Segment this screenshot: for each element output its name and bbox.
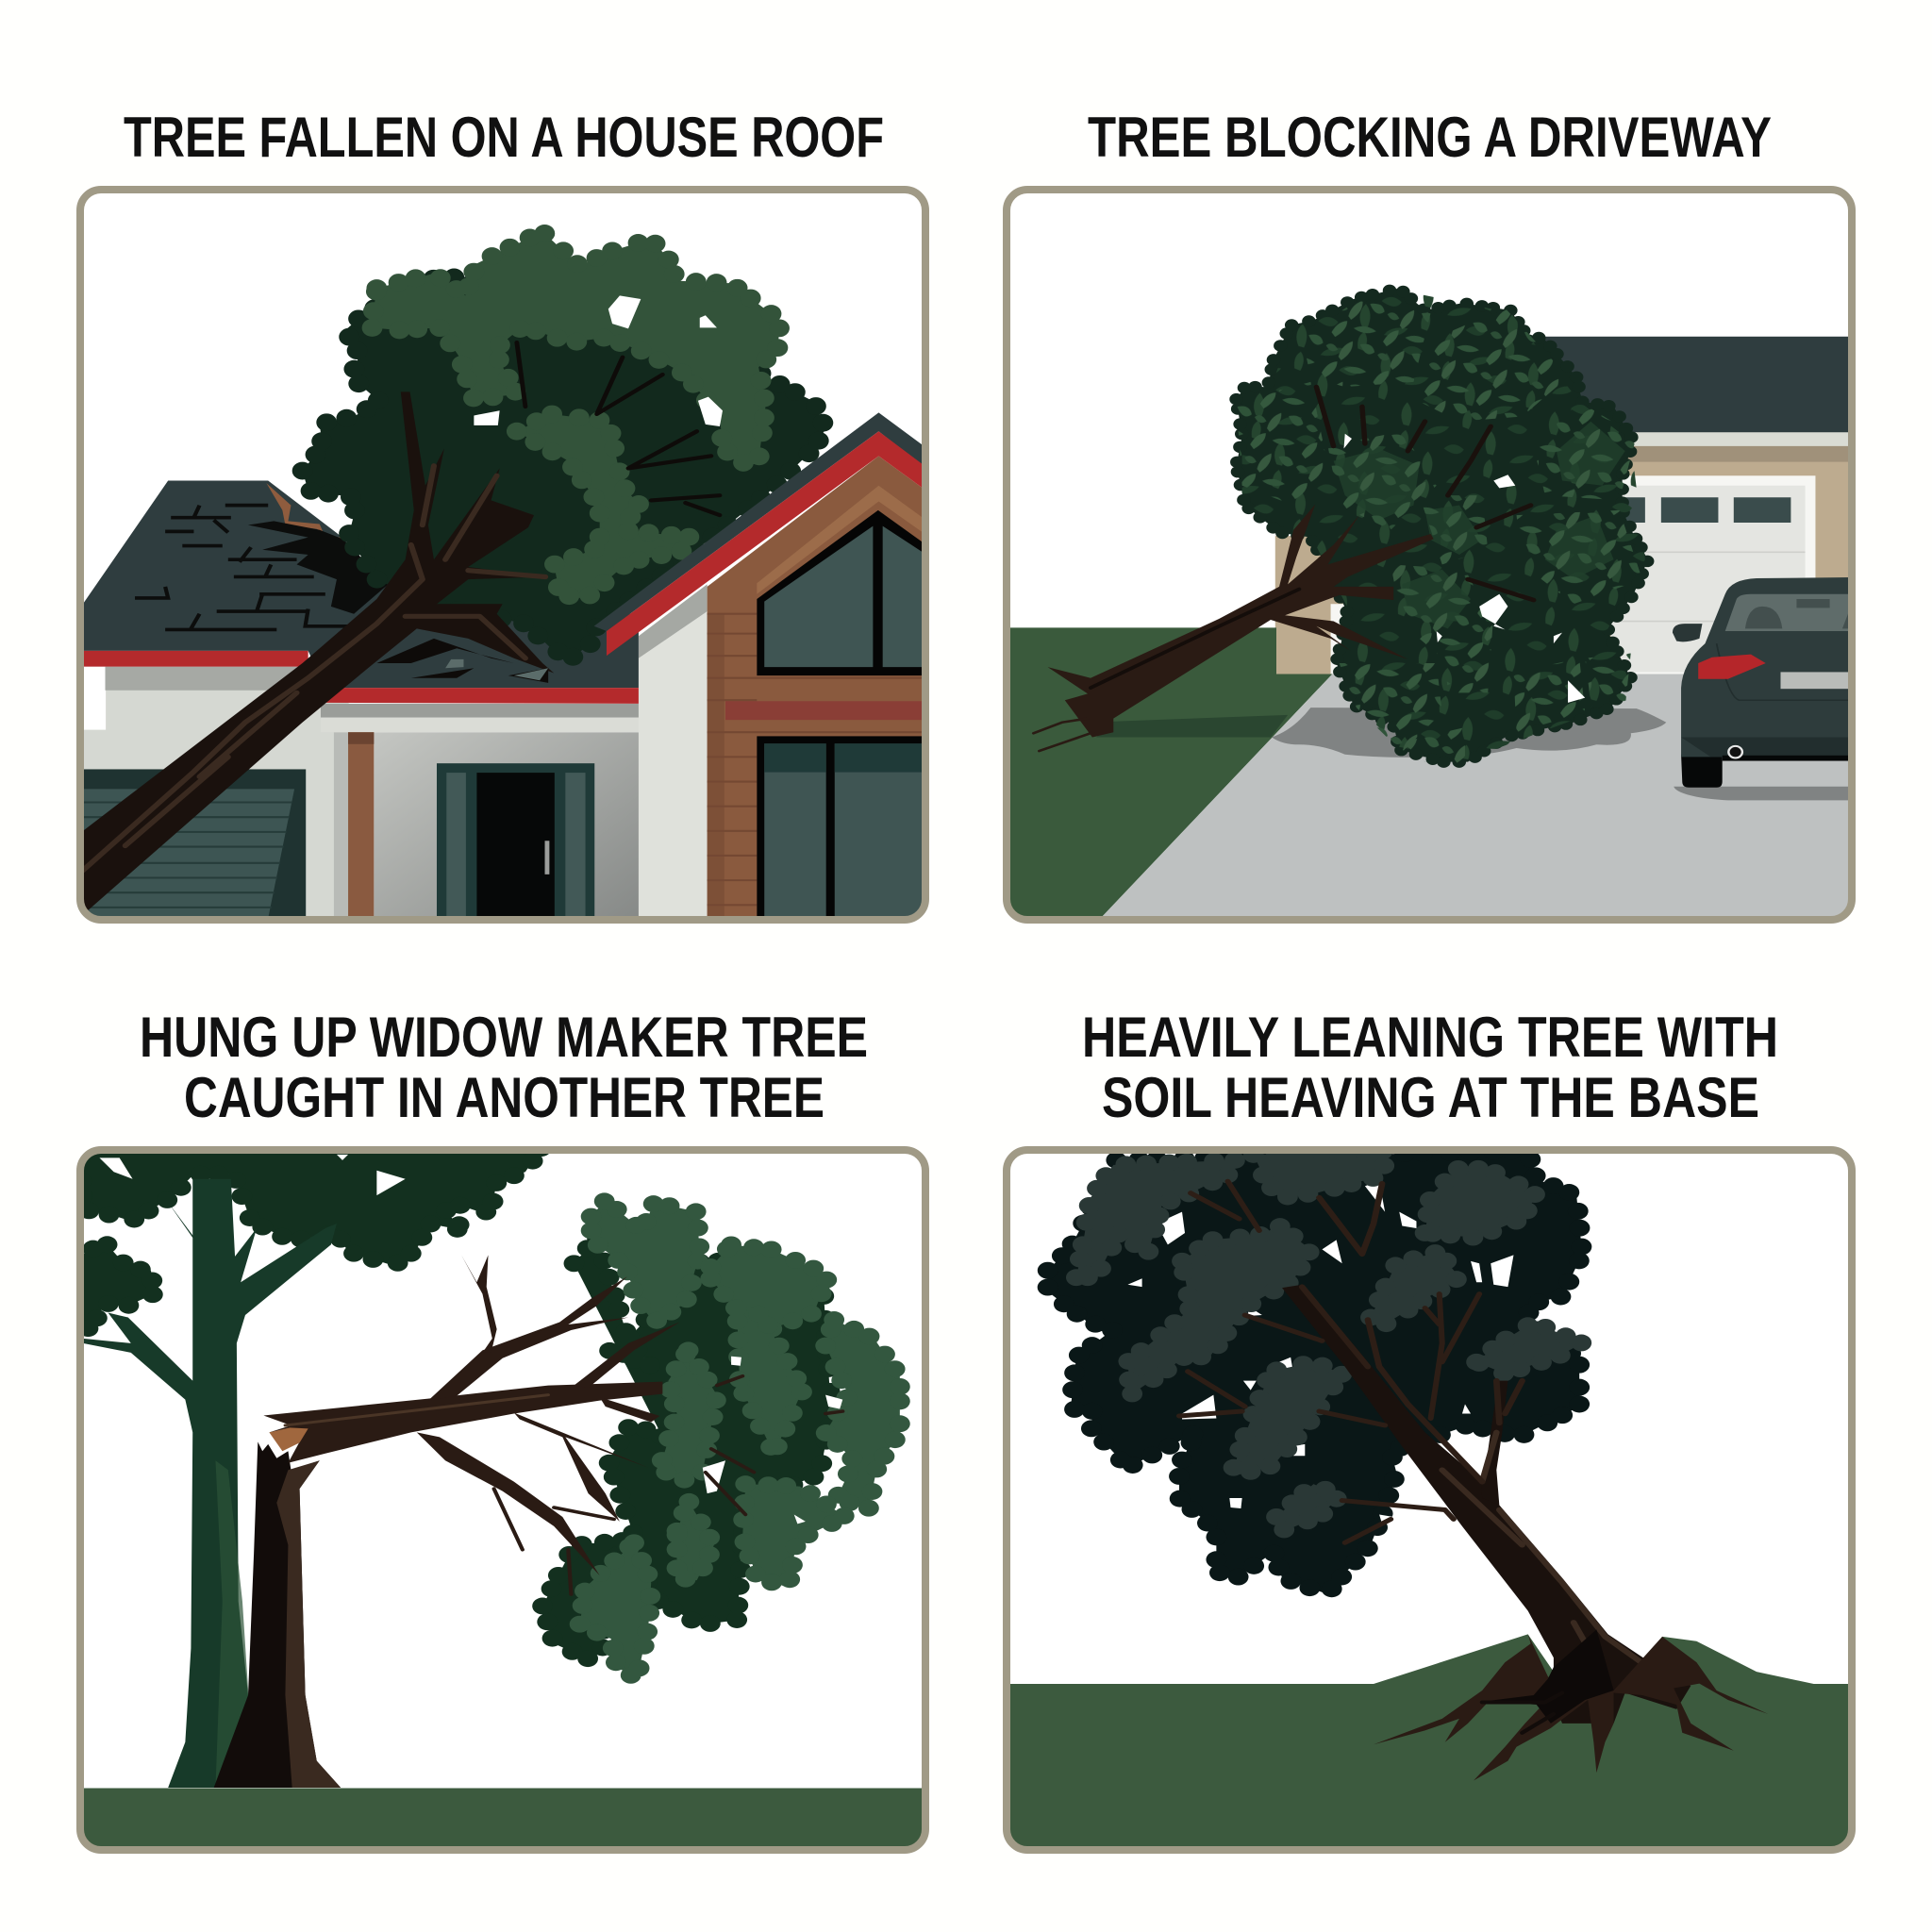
- panel frame: hung up widow maker tree: [75, 1146, 928, 1854]
- leaf clusters: [1237, 301, 1642, 764]
- panel: hung up widow maker tree: [74, 1146, 925, 1852]
- panel: heavily leaning tree: [1007, 1150, 1852, 1850]
- lawn and driveway: [1008, 627, 1851, 920]
- heading: hung up widow maker tree: HUNG UP WIDOW MAKER TREE: [140, 1006, 868, 1069]
- sky gaps: [1344, 434, 1585, 703]
- background tree canopy: [74, 1146, 542, 1329]
- panel: tree blocking driveway: [74, 190, 1852, 1852]
- heading: heavily leaning tree: SOIL HEAVING AT THE BASE: [1102, 1066, 1759, 1129]
- heading: tree fallen on a house roof: TREE FALLEN ON A HOUSE ROOF: [124, 106, 884, 169]
- ground: [79, 1789, 925, 1852]
- sky gaps: [1127, 1181, 1513, 1524]
- foliage of hung limb: [542, 1200, 900, 1679]
- background leaves: [1242, 291, 1645, 759]
- panel: tree fallen on house: [79, 190, 924, 920]
- fallen tree canopy: [1033, 289, 1648, 764]
- heading: tree blocking a driveway: TREE BLOCKING A DRIVEWAY: [1088, 106, 1772, 169]
- lawn with heaved soil: [1008, 1634, 1851, 1850]
- broken stump: [214, 1441, 341, 1788]
- right gable wing: [639, 456, 923, 920]
- exposed roots: [1374, 1629, 1768, 1781]
- front door: [437, 763, 594, 919]
- roof peak over tree: [594, 412, 923, 656]
- heading: heavily leaning tree: [1082, 1006, 1778, 1129]
- dark canopy: [1048, 1151, 1582, 1594]
- leaning trunk and branches: [1179, 1181, 1690, 1724]
- panel frame: heavily leaning tree: [1003, 1146, 1856, 1854]
- heading: hung up widow maker tree: [140, 1006, 868, 1129]
- fallen trunk and branches: [83, 342, 720, 915]
- heading: heavily leaning tree: HEAVILY LEANING TREE WITH: [1082, 1006, 1778, 1069]
- heading: hung up widow maker tree: CAUGHT IN ANOTHER TREE: [184, 1066, 824, 1129]
- panel frame: tree fallen on house: [75, 186, 928, 924]
- background tree trunk: [83, 1179, 337, 1788]
- lighter foliage clumps: [1076, 1151, 1582, 1531]
- tree canopy: mid green layer: [371, 231, 780, 599]
- garage and house: [1275, 337, 1851, 675]
- tree canopy: dark layer: [303, 269, 825, 658]
- hung broken limb with branches: [263, 1255, 842, 1594]
- damaged roof: [83, 480, 639, 704]
- house walls: [83, 667, 640, 920]
- parked car: [1673, 577, 1851, 800]
- fallen trunk with roots: [1033, 387, 1534, 751]
- panel frame: tree blocking driveway: [1003, 186, 1856, 924]
- sky gaps in canopy: [474, 295, 723, 426]
